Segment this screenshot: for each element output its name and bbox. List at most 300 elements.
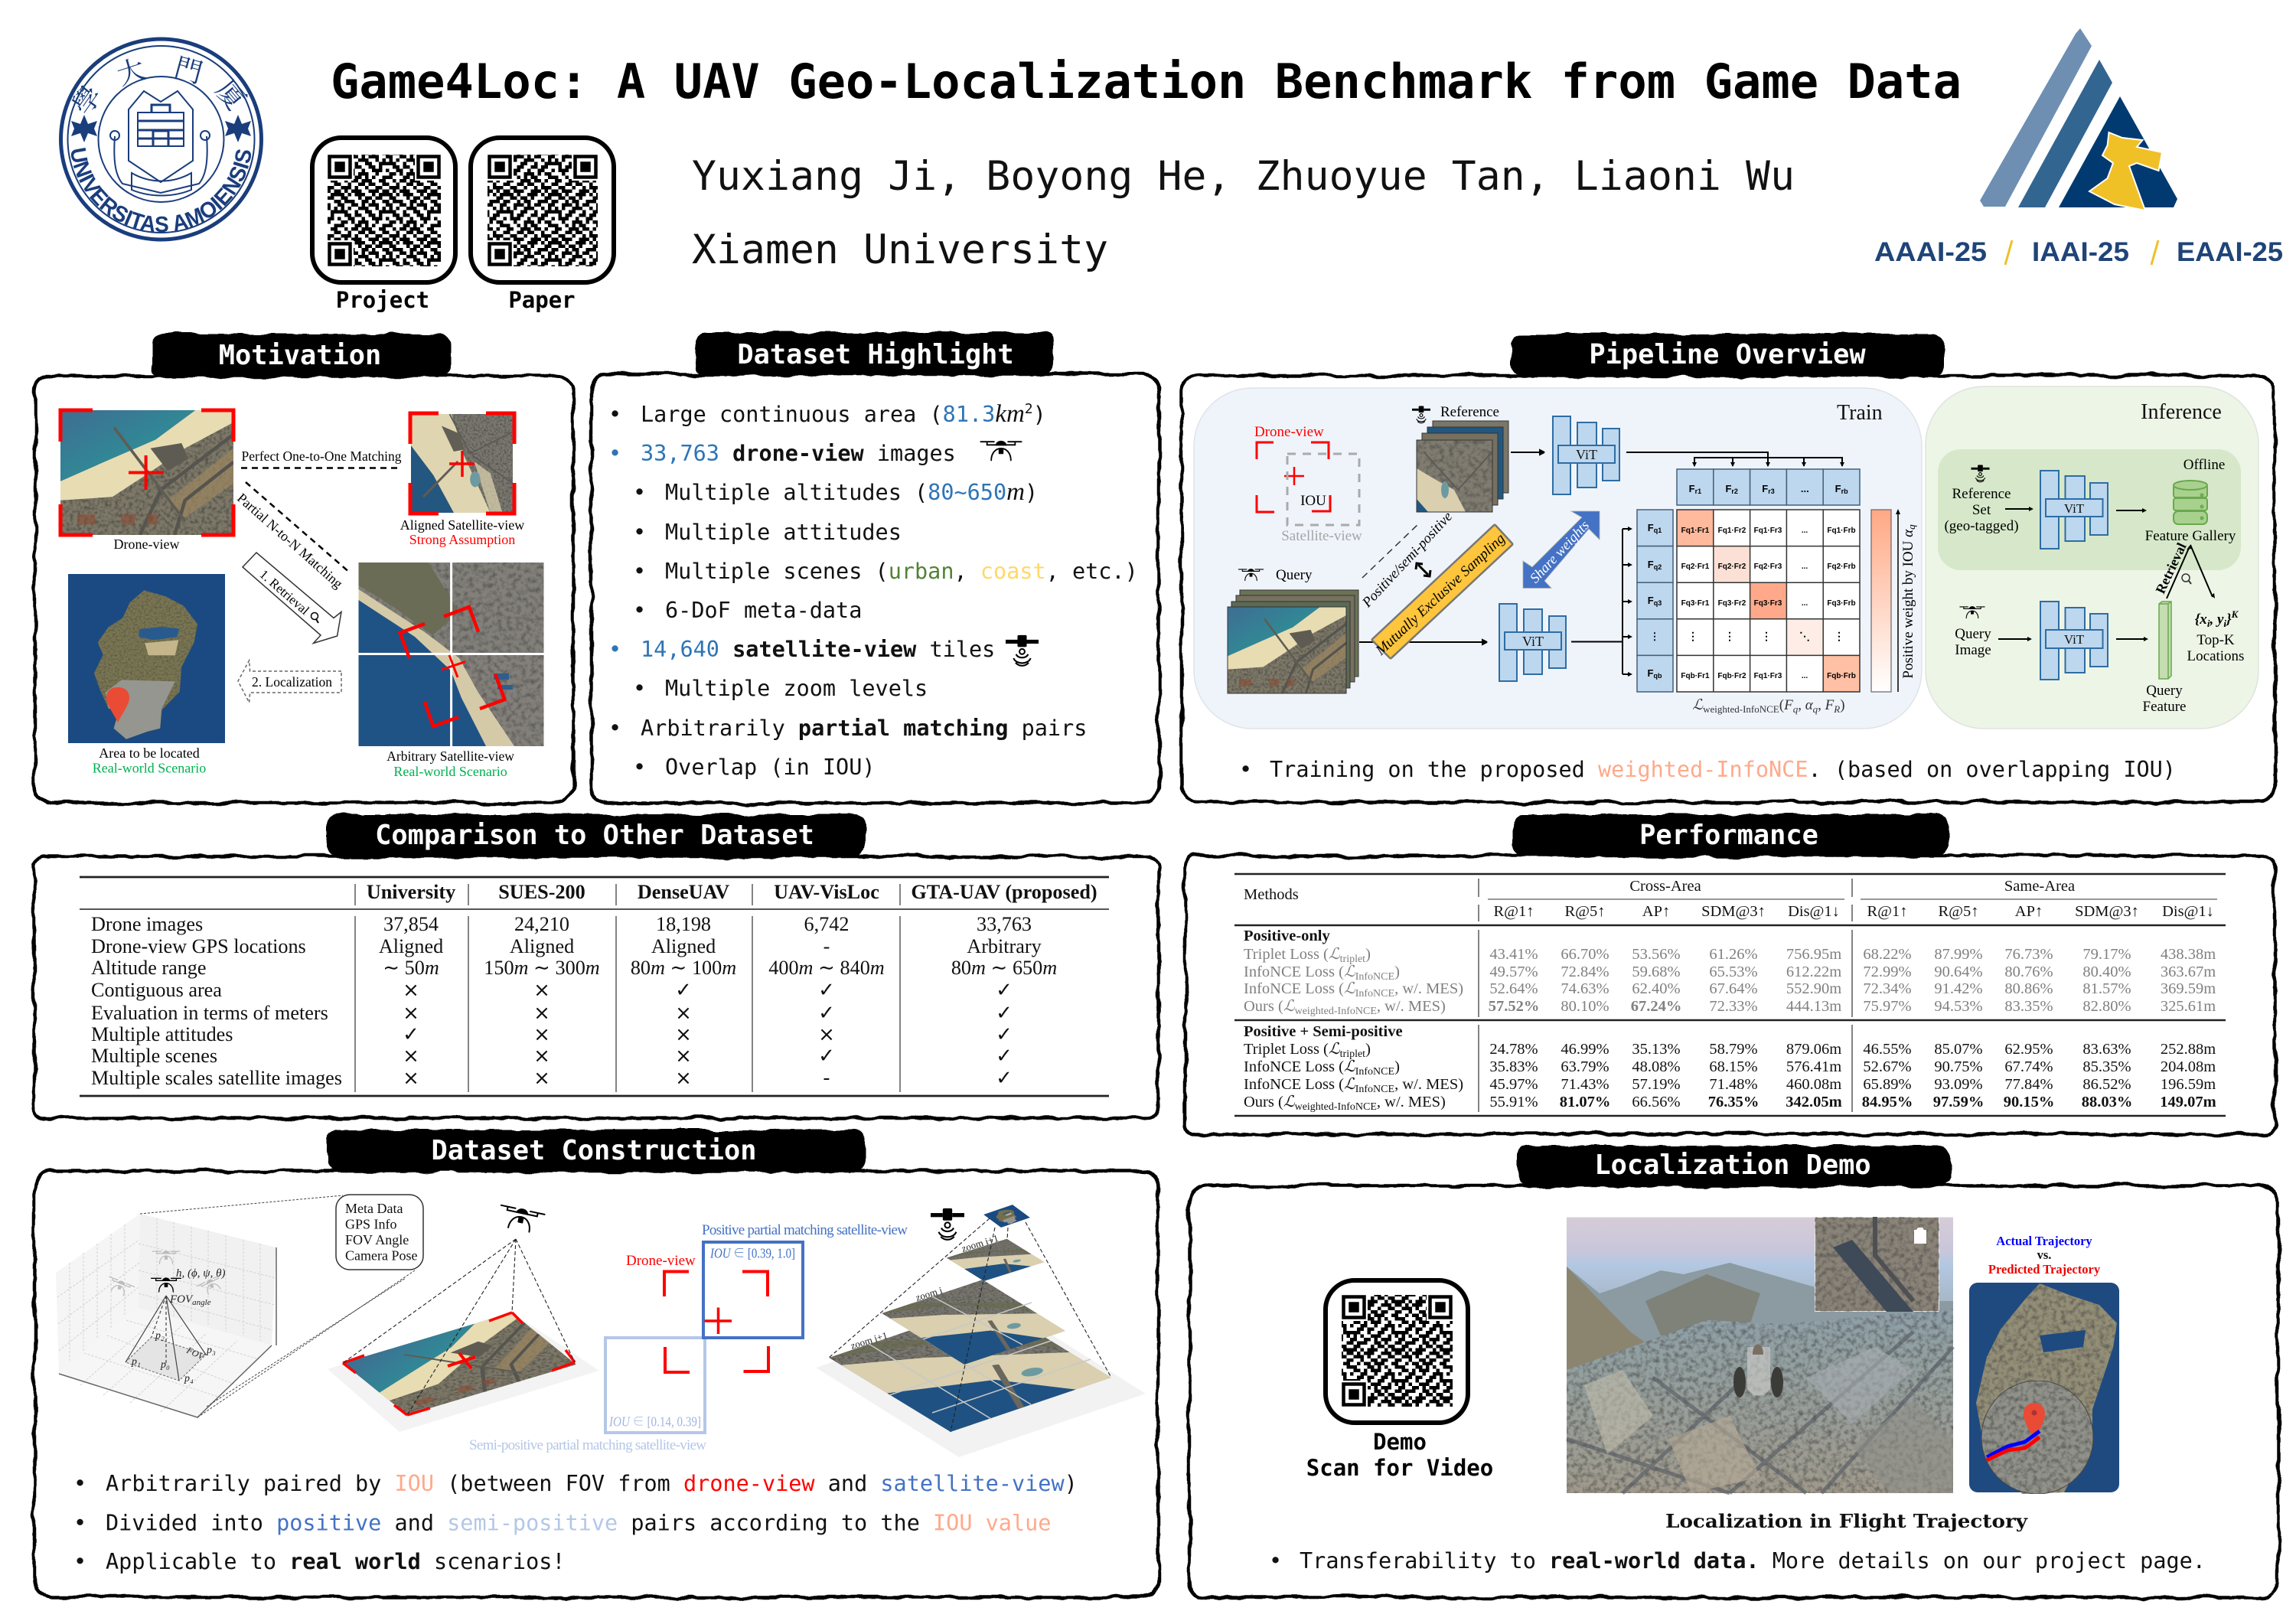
similarity matrix: ⋮ xyxy=(1688,630,1698,642)
similarity matrix: Fq1·Fr3 xyxy=(1754,527,1782,535)
AAAI logo: EAAI-25 xyxy=(2177,237,2283,267)
highlight bullet list: • xyxy=(633,598,646,623)
similarity matrix: Fq3·Fr1 xyxy=(1681,599,1710,608)
dataset highlight heading: Dataset Highlight xyxy=(737,339,1014,370)
comparison table: × xyxy=(818,1023,835,1046)
comparison table: GTA-UAV (proposed) xyxy=(911,881,1097,903)
metadata callout: Meta Data xyxy=(345,1201,403,1216)
top-K locations: , y xyxy=(2209,611,2224,628)
comparison table: Multiple attitudes xyxy=(91,1023,233,1045)
metadata callout: GPS Info xyxy=(345,1217,397,1232)
comparison table: Multiple scales satellite images xyxy=(91,1067,342,1089)
performance table: R@5↑ xyxy=(1564,903,1606,920)
performance table: 363.67m xyxy=(2161,964,2216,980)
performance table: 67.64% xyxy=(1709,980,1758,997)
performance table: Cross-Area xyxy=(1629,878,1701,895)
satellite zoom pyramid: zoom i xyxy=(914,1284,944,1303)
query feature bar: Feature xyxy=(2143,699,2186,715)
performance table: 88.03% xyxy=(2082,1094,2132,1110)
highlight bullet list: • xyxy=(633,676,646,701)
comparison table: ✓ xyxy=(403,1023,419,1046)
reference feature row: F xyxy=(1762,483,1775,495)
comparison heading xyxy=(327,814,865,856)
query image label: Query xyxy=(1955,626,1991,642)
drone-view image xyxy=(60,410,233,552)
top-K locations: Top-K xyxy=(2197,632,2235,648)
comparison table: DenseUAV xyxy=(638,881,729,903)
area map image xyxy=(68,574,225,776)
performance table: 46.55% xyxy=(1863,1041,1912,1058)
arrow: share weights: Share weights xyxy=(1528,518,1593,586)
reference ViT block xyxy=(1553,416,1619,494)
header: university seal: 學 xyxy=(62,77,109,122)
performance heading: Performance xyxy=(1639,820,1818,851)
dataset construction heading: Dataset Construction xyxy=(431,1135,757,1166)
performance table: R@1↑ xyxy=(1493,903,1534,920)
panel: localization demo xyxy=(1189,1146,2278,1597)
performance table: 55.91% xyxy=(1489,1094,1538,1110)
construction bullet list: • xyxy=(73,1471,86,1496)
area map image: Area to be located xyxy=(99,745,200,761)
top-K locations: K xyxy=(2231,608,2239,620)
query image label xyxy=(1955,606,1991,658)
comparison table: 33,763 xyxy=(977,913,1032,935)
performance table: Dis@1↓ xyxy=(2162,903,2214,920)
IOU partial matching boxes: IOU ∈ [0.39, 1.0] xyxy=(709,1246,795,1261)
comparison table: ✓ xyxy=(996,1023,1013,1046)
comparison table: - xyxy=(823,1067,830,1090)
performance table: 72.34% xyxy=(1863,980,1912,997)
dataset highlight heading xyxy=(696,332,1054,375)
authors: Yuxiang Ji, Boyong He, Zhuoyue Tan, Liaoni Wu xyxy=(692,153,1795,200)
comparison table: × xyxy=(403,1002,419,1025)
comparison table: Drone images xyxy=(91,913,203,935)
flight scene image xyxy=(1567,1217,1953,1493)
comparison table: × xyxy=(675,1023,692,1046)
reference feature row: ... xyxy=(1801,483,1809,494)
comparison table: × xyxy=(403,979,419,1002)
similarity matrix: ... xyxy=(1802,599,1808,608)
performance table: 252.88m xyxy=(2161,1041,2216,1058)
IOU partial matching boxes xyxy=(469,1222,908,1453)
satellite zoom pyramid xyxy=(816,1205,1146,1457)
comparison table: × xyxy=(533,1002,550,1025)
project QR code xyxy=(312,138,455,313)
reference image stack xyxy=(1412,404,1508,512)
performance table: Positive-only xyxy=(1244,928,1330,944)
performance table: 52.64% xyxy=(1489,980,1538,997)
similarity matrix: Fqb·Frb xyxy=(1827,672,1856,680)
weight gradient bar: q xyxy=(1906,524,1917,530)
similarity matrix: ⋮ xyxy=(1724,630,1735,642)
comparison table: 18,198 xyxy=(656,913,711,935)
perspective drone view xyxy=(328,1204,599,1432)
comparison table: ✓ xyxy=(996,1067,1013,1090)
comparison table: ✓ xyxy=(996,1045,1013,1068)
dataset construction heading xyxy=(327,1130,866,1171)
3D drone geometry plot: p₄ xyxy=(184,1373,194,1384)
metadata callout: FOV Angle xyxy=(345,1232,409,1247)
performance table: R@1↑ xyxy=(1867,903,1908,920)
performance table: 460.08m xyxy=(1786,1076,1841,1093)
arrow: query to ViT xyxy=(1359,640,1487,644)
header: university seal: UNIVERSITAS AMOIENSIS xyxy=(70,148,251,232)
reference set label: Set xyxy=(1972,502,1991,518)
IOU illustration: Drone-view xyxy=(1254,424,1324,440)
performance table: weighted-InfoNCE xyxy=(1295,1101,1377,1113)
reference feature row: F xyxy=(1835,483,1848,495)
construction bullet list: Divided into xyxy=(106,1511,276,1535)
performance table: 68.15% xyxy=(1709,1058,1758,1075)
comparison table: 37,854 xyxy=(383,913,439,935)
top-K locations: {x xyxy=(2195,611,2207,628)
performance table: Dis@1↓ xyxy=(1788,903,1840,920)
performance table: 82.80% xyxy=(2082,998,2131,1015)
loss formula: α xyxy=(1805,697,1814,713)
performance table: 81.57% xyxy=(2082,980,2131,997)
comparison table: SUES-200 xyxy=(498,881,585,903)
performance table: Ours (ℒ xyxy=(1244,998,1295,1015)
performance table: 86.52% xyxy=(2082,1076,2131,1093)
IOU illustration xyxy=(1254,424,1362,544)
performance table: 552.90m xyxy=(1786,980,1841,997)
loss formula: weighted-InfoNCE xyxy=(1703,703,1779,715)
performance table: Triplet Loss (ℒ xyxy=(1244,1041,1340,1058)
header: university seal: 門 xyxy=(171,47,207,91)
performance table: 24.78% xyxy=(1489,1041,1538,1058)
reference feature row: r2 xyxy=(1731,488,1738,495)
title: Game4Loc: A UAV Geo-Localization Benchmark from Game Data xyxy=(331,54,1962,109)
similarity matrix: Fq2·Fr1 xyxy=(1681,563,1710,571)
demo heading: Localization Demo xyxy=(1594,1150,1871,1181)
top-K locations: } xyxy=(2225,611,2232,628)
performance table: 77.84% xyxy=(2004,1076,2053,1093)
performance table: InfoNCE xyxy=(1355,971,1394,983)
performance table: R@5↑ xyxy=(1938,903,1979,920)
similarity matrix: Fq3·Fr3 xyxy=(1754,599,1782,608)
performance table: 66.56% xyxy=(1632,1094,1681,1110)
loss formula: R xyxy=(1833,703,1840,715)
performance table: 71.48% xyxy=(1709,1076,1758,1093)
performance table: , w/. MES) xyxy=(1377,998,1446,1015)
performance table: 204.08m xyxy=(2161,1058,2216,1075)
performance table: 80.10% xyxy=(1561,998,1609,1015)
similarity matrix: ... xyxy=(1802,563,1808,571)
performance table: AP↑ xyxy=(1642,903,1670,920)
performance table: 61.26% xyxy=(1709,946,1758,963)
performance table: 57.52% xyxy=(1489,998,1539,1015)
performance table: 52.67% xyxy=(1863,1058,1912,1075)
comparison table: Drone-view GPS locations xyxy=(91,935,306,957)
construction bullet list xyxy=(73,1471,1078,1574)
motivation heading: Motivation xyxy=(219,340,381,371)
inference diagram: Feature Gallery xyxy=(2145,528,2236,544)
query feature column: q1 xyxy=(1654,527,1662,534)
comparison table: ✓ xyxy=(996,979,1013,1002)
highlight bullet list: Multiple scenes (urban, coast, etc.) xyxy=(665,559,1138,584)
arrow: localization xyxy=(238,660,341,703)
query feature column: q3 xyxy=(1654,599,1662,607)
query feature column: ⋮ xyxy=(1650,631,1659,642)
performance table: 62.40% xyxy=(1632,980,1681,997)
icon: feature gallery database xyxy=(2174,481,2207,524)
highlight bullet list: • xyxy=(608,402,621,427)
highlight bullet list: Multiple altitudes (80~650m) xyxy=(665,478,1038,506)
performance table: SDM@3↑ xyxy=(2075,903,2139,920)
3D drone geometry plot: p₀ xyxy=(160,1359,170,1371)
3D drone geometry plot: FOV xyxy=(184,1345,207,1362)
performance table: , w/. MES) xyxy=(1394,980,1463,997)
highlight bullet list: • xyxy=(608,441,621,466)
3D drone geometry plot xyxy=(56,1214,276,1417)
panel: pipeline overview xyxy=(1182,334,2275,802)
IOU partial matching boxes: IOU ∈ [0.14, 0.39] xyxy=(608,1414,701,1430)
performance table: InfoNCE xyxy=(1355,1084,1394,1095)
performance table: InfoNCE xyxy=(1355,1066,1394,1078)
affiliation: Xiamen University xyxy=(692,227,1108,273)
comparison table: × xyxy=(675,1045,692,1068)
arrow: localization: 2. Localization xyxy=(252,674,332,690)
performance table: Methods xyxy=(1244,886,1299,903)
query feature bar: Query xyxy=(2146,683,2183,699)
performance table: InfoNCE Loss (ℒ xyxy=(1244,964,1355,980)
performance table: 48.08% xyxy=(1632,1058,1681,1075)
arrow: retrieval xyxy=(243,553,341,643)
performance table: 57.19% xyxy=(1632,1076,1681,1093)
performance table: Same-Area xyxy=(2004,878,2075,895)
comparison table: ✓ xyxy=(675,979,692,1002)
performance table: 85.07% xyxy=(1934,1041,1983,1058)
loss formula: F xyxy=(1783,697,1793,713)
performance table: 80.40% xyxy=(2082,964,2131,980)
performance table: 196.59m xyxy=(2161,1076,2216,1093)
comparison table: UAV-VisLoc xyxy=(774,881,879,903)
performance table: 83.35% xyxy=(2004,998,2053,1015)
performance table: 72.33% xyxy=(1709,998,1758,1015)
performance heading xyxy=(1512,814,1948,856)
highlight bullet list: ) xyxy=(1033,402,1046,427)
performance table: InfoNCE Loss (ℒ xyxy=(1244,1058,1355,1075)
motivation heading xyxy=(152,334,450,377)
query feature column: qb xyxy=(1653,672,1662,680)
arrow: retrieval: 1. Retrieval xyxy=(256,567,312,618)
similarity matrix: ⋮ xyxy=(1834,630,1844,642)
similarity matrix: Fq1·Fr1 xyxy=(1681,527,1710,535)
IOU partial matching boxes: Semi-positive partial matching satellite-view xyxy=(469,1437,706,1453)
performance table: 85.35% xyxy=(2082,1058,2131,1075)
performance table: Triplet Loss (ℒ xyxy=(1244,946,1340,963)
highlight bullet list: Overlap (in IOU) xyxy=(665,755,876,780)
performance table: 97.59% xyxy=(1933,1094,1984,1110)
header: university seal: 厦 xyxy=(208,70,256,117)
loss formula: , xyxy=(1818,697,1825,713)
comparison table: ✓ xyxy=(818,1002,835,1025)
comparison table: 6,742 xyxy=(804,913,849,935)
comparison table: × xyxy=(675,1067,692,1090)
arbitrary satellite-view image xyxy=(358,563,544,779)
query image stack xyxy=(1228,567,1358,693)
inset satellite view xyxy=(1815,1217,1939,1312)
performance table: 45.97% xyxy=(1489,1076,1538,1093)
performance table: 612.22m xyxy=(1786,964,1841,980)
performance table: ) xyxy=(1365,1041,1371,1058)
performance table: 67.24% xyxy=(1631,998,1681,1015)
performance table: 76.35% xyxy=(1708,1094,1759,1110)
performance table: InfoNCE Loss (ℒ xyxy=(1244,980,1355,997)
performance table: weighted-InfoNCE xyxy=(1295,1006,1377,1017)
performance table: ) xyxy=(1394,964,1400,980)
performance table: 65.53% xyxy=(1709,964,1758,980)
inference diagram xyxy=(1926,386,2258,729)
arbitrary satellite-view image: Arbitrary Satellite-view xyxy=(386,748,514,764)
3D drone geometry plot: p₂ xyxy=(155,1330,165,1342)
3D drone geometry plot: FOV xyxy=(170,1293,192,1306)
query feature column: F xyxy=(1648,667,1653,679)
comparison table: Contiguous area xyxy=(91,979,222,1001)
construction bullet list: positive and semi-positive pairs according to the IOU value xyxy=(276,1511,1051,1535)
performance table: 80.76% xyxy=(2004,964,2053,980)
comparison table: 400m ∼ 840m xyxy=(768,957,885,979)
comparison table: Multiple scenes xyxy=(91,1045,217,1067)
similarity matrix: ... xyxy=(1802,672,1808,680)
arbitrary satellite-view image: Real-world Scenario xyxy=(393,764,507,779)
comparison table: Aligned xyxy=(379,935,443,957)
pipeline bullet: Training on the proposed xyxy=(1270,757,1598,782)
offline ViT block xyxy=(2040,471,2108,549)
IOU illustration: IOU xyxy=(1300,493,1326,509)
panel: dataset highlight xyxy=(592,332,1159,803)
comparison table: 80m ∼ 650m xyxy=(951,957,1057,979)
train diagram xyxy=(1194,388,1922,729)
construction bullet list: Applicable to xyxy=(106,1549,289,1574)
aligned satellite-view image: Strong Assumption xyxy=(409,532,515,547)
demo bullet: Transferability to xyxy=(1300,1548,1549,1573)
online ViT block xyxy=(2040,602,2108,680)
performance table: triplet xyxy=(1340,954,1365,965)
performance table: 65.89% xyxy=(1863,1076,1912,1093)
reference image stack: Reference xyxy=(1440,404,1499,420)
query feature column xyxy=(1637,510,1673,692)
comparison table: × xyxy=(533,1045,550,1068)
3D drone geometry plot: p₃ xyxy=(206,1345,216,1356)
performance table: 63.79% xyxy=(1561,1058,1609,1075)
mutually exclusive sampling band: Mutually Exclusive Sampling xyxy=(1372,530,1508,659)
query feature bar xyxy=(2143,602,2186,715)
reference set label xyxy=(1944,465,2019,534)
query ViT block xyxy=(1499,604,1566,681)
highlight bullet list: 33,763 drone-view images xyxy=(641,441,956,466)
comparison table: × xyxy=(403,1045,419,1068)
inference diagram: Inference xyxy=(2141,400,2222,424)
comparison table: 24,210 xyxy=(514,913,569,935)
3D drone geometry plot: h, (ϕ, ψ, θ) xyxy=(176,1267,225,1280)
performance table: 438.38m xyxy=(2161,946,2216,963)
performance table: 325.61m xyxy=(2161,998,2216,1015)
performance table: 90.75% xyxy=(1934,1058,1983,1075)
performance table: 49.57% xyxy=(1489,964,1538,980)
trajectory legend: Actual Trajectory xyxy=(1996,1234,2092,1248)
performance table: 67.74% xyxy=(2004,1058,2053,1075)
loss formula: , xyxy=(1798,697,1805,713)
highlight bullet list: • xyxy=(633,755,646,780)
comparison table: Altitude range xyxy=(91,957,207,979)
inference diagram: Offline xyxy=(2183,457,2225,473)
comparison table: ✓ xyxy=(818,1045,835,1068)
similarity matrix: Fqb·Fr1 xyxy=(1681,672,1710,680)
query image stack: Query xyxy=(1276,567,1313,583)
performance table: 62.95% xyxy=(2004,1041,2053,1058)
demo caption: Localization in Flight Trajectory xyxy=(1665,1510,2028,1532)
comparison table: × xyxy=(675,1002,692,1025)
performance table: 83.63% xyxy=(2082,1041,2131,1058)
comparison table: ✓ xyxy=(996,1002,1013,1025)
comparison table: ∼ 50m xyxy=(383,957,439,979)
paper QR code: Paper xyxy=(508,287,576,313)
icon: drone xyxy=(980,441,1022,461)
arrow: reference to ViT xyxy=(1511,450,1544,455)
performance table: , w/. MES) xyxy=(1394,1076,1463,1093)
performance table: 43.41% xyxy=(1489,946,1538,963)
query feature column: F xyxy=(1648,595,1654,606)
performance table: 91.42% xyxy=(1934,980,1983,997)
similarity matrix: Fq3·Fr2 xyxy=(1718,599,1746,608)
similarity matrix: ⋱ xyxy=(1799,630,1810,642)
online ViT block: ViT xyxy=(2064,632,2085,647)
demo QR code: Demo xyxy=(1373,1429,1427,1455)
performance table: 76.73% xyxy=(2004,946,2053,963)
demo QR code: Scan for Video xyxy=(1306,1455,1493,1481)
similarity matrix: ⋮ xyxy=(1761,630,1772,642)
demo bullet: • xyxy=(1269,1548,1282,1573)
similarity matrix: Fq1·Frb xyxy=(1827,527,1856,535)
pipeline bullet: weighted-InfoNCE. (based on overlapping IOU) xyxy=(1598,757,2176,782)
performance table: 35.83% xyxy=(1489,1058,1538,1075)
comparison table: × xyxy=(533,1067,550,1090)
demo bullet: real-world data. More details on our project page. xyxy=(1549,1548,2206,1573)
comparison table: - xyxy=(823,935,830,957)
comparison table: Aligned xyxy=(651,935,716,957)
top-K locations xyxy=(2187,608,2244,664)
performance table: 59.68% xyxy=(1632,964,1681,980)
similarity matrix xyxy=(1677,510,1860,692)
similarity matrix: Fq2·Frb xyxy=(1827,563,1856,571)
trajectory legend: Predicted Trajectory xyxy=(1988,1262,2101,1277)
reference feature row: rb xyxy=(1841,488,1848,495)
weight gradient bar: Positive weight by IOU α xyxy=(1900,530,1916,679)
highlight bullet list: • xyxy=(633,559,646,584)
performance table: 87.99% xyxy=(1934,946,1983,963)
train diagram: Train xyxy=(1837,401,1883,425)
performance table: 444.13m xyxy=(1786,998,1841,1015)
performance table: 90.64% xyxy=(1934,964,1983,980)
performance table: 58.79% xyxy=(1709,1041,1758,1058)
reference set label: Reference xyxy=(1952,486,2011,502)
metadata callout xyxy=(140,1195,423,1417)
highlight bullet list: • xyxy=(608,637,621,662)
paper QR code xyxy=(471,138,614,313)
reference feature row xyxy=(1677,469,1860,505)
panel: dataset construction xyxy=(34,1130,1158,1597)
performance table: ) xyxy=(1394,1058,1400,1075)
performance table: 71.43% xyxy=(1561,1076,1609,1093)
loss formula: ) xyxy=(1840,697,1845,713)
comparison table: Aligned xyxy=(510,935,574,957)
comparison table: 80m ∼ 100m xyxy=(631,957,736,979)
performance table: 80.86% xyxy=(2004,980,2053,997)
top-K locations: i xyxy=(2223,618,2226,629)
performance table: 72.99% xyxy=(1863,964,1912,980)
query feature column: q2 xyxy=(1654,563,1662,571)
